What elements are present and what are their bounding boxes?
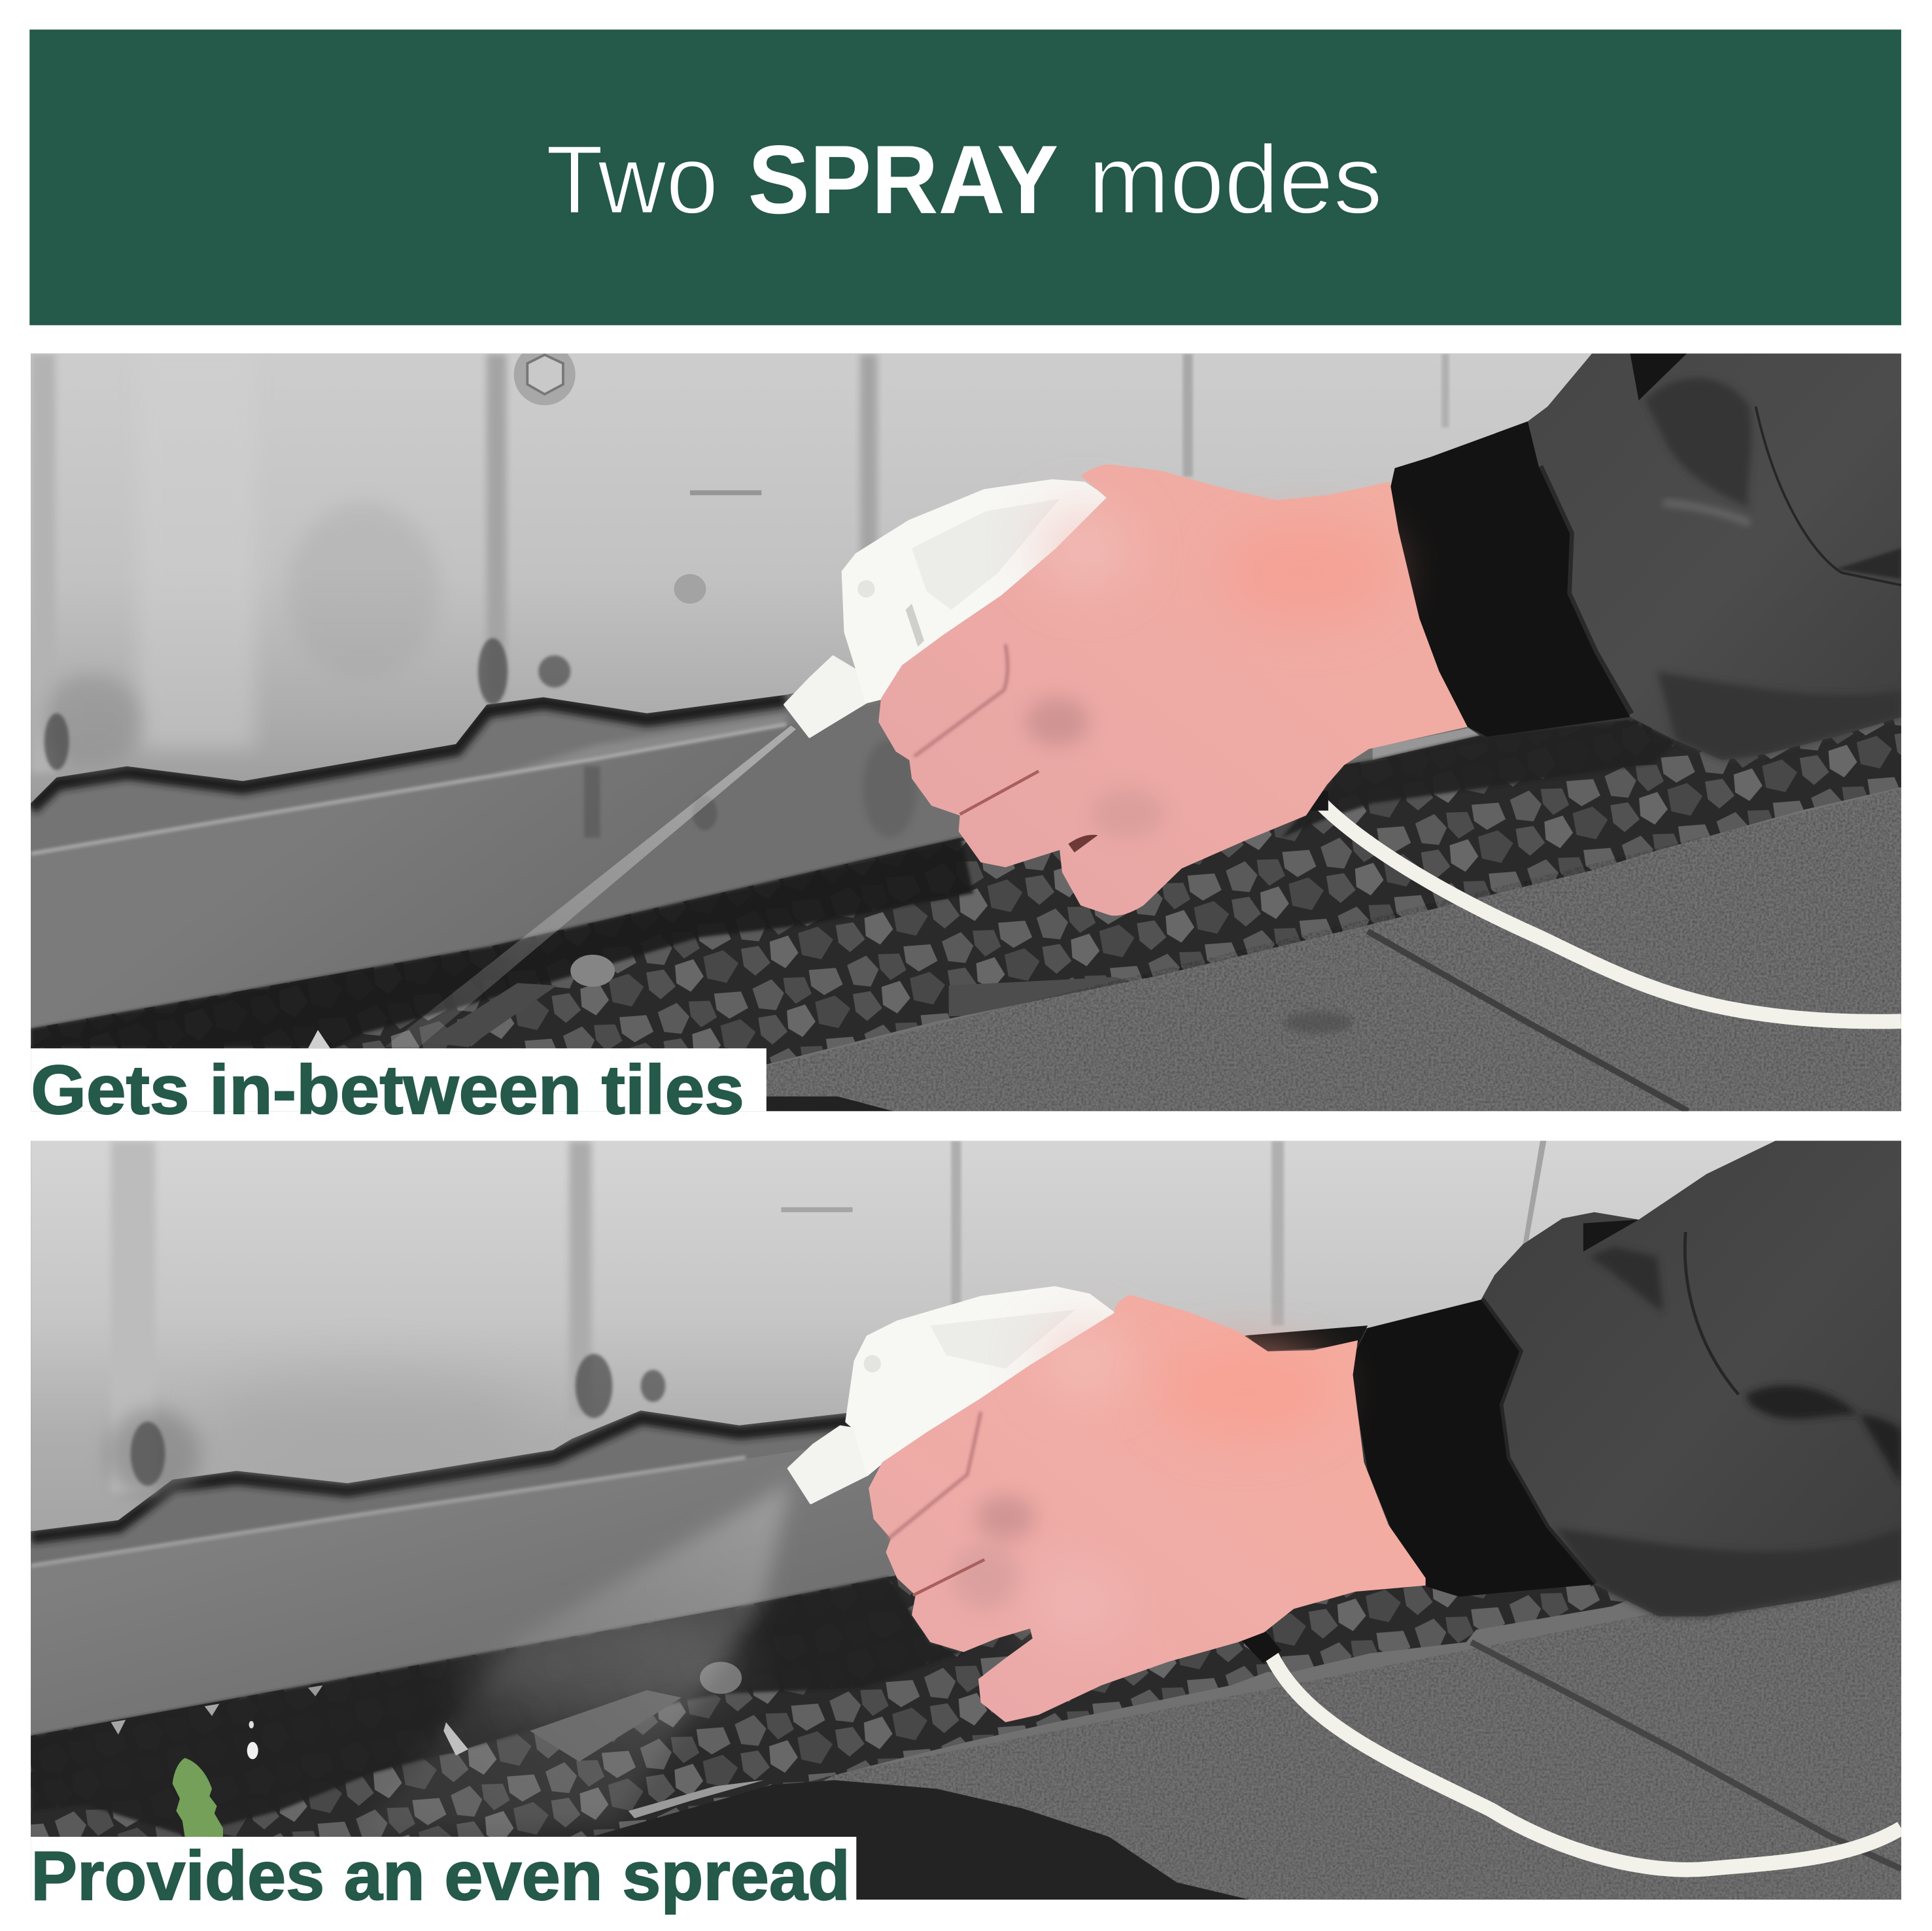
corrugated wall <box>31 354 1602 803</box>
spray hose <box>1271 1656 1901 1870</box>
sprayer head <box>789 1288 1114 1503</box>
photo base tone <box>31 354 1901 1111</box>
fine spray jet <box>385 726 796 1047</box>
soft mist cone <box>357 1482 791 1836</box>
ribbed cuff <box>1352 1300 1595 1597</box>
ribbed cuff <box>1390 421 1630 737</box>
title: modes <box>1088 125 1383 234</box>
beam face <box>31 1429 937 1735</box>
jacket sleeve <box>1528 354 1901 760</box>
beam ledge under wall <box>31 693 881 855</box>
title: SPRAY <box>748 125 1058 234</box>
sprayer head <box>785 481 1107 737</box>
corrugated wall <box>31 1141 1780 1531</box>
hand <box>878 464 1468 915</box>
hose connector <box>1239 1626 1281 1663</box>
spray hose <box>1321 803 1901 1021</box>
gravel bed <box>31 717 1901 1111</box>
gravel bed <box>31 1565 1676 1837</box>
beam ledge under wall <box>31 1386 937 1567</box>
caption: gets in-between tiles: Gets in-between tiles <box>31 1052 744 1129</box>
paving slabs <box>591 1565 1901 1900</box>
photo panel: provides an even spread <box>31 1141 1901 1900</box>
jacket sleeve <box>1481 1141 1901 1616</box>
gap under wall at wrist <box>1247 1325 1368 1352</box>
hand <box>869 1295 1426 1722</box>
header banner <box>29 29 1901 325</box>
paving slabs <box>767 787 1901 1111</box>
caption: provides an even spread: Provides an even spread <box>31 1838 850 1915</box>
dandelion weed <box>173 1758 223 1837</box>
wall bolt <box>514 353 576 405</box>
beam face <box>31 702 1480 1029</box>
photo panel: gets in-between tiles <box>31 344 1901 1111</box>
title: Two <box>546 125 718 234</box>
hose connector <box>1311 791 1328 811</box>
photo base tone <box>31 1141 1901 1900</box>
water drips <box>111 1685 323 1759</box>
dark mat <box>591 1780 1249 1900</box>
